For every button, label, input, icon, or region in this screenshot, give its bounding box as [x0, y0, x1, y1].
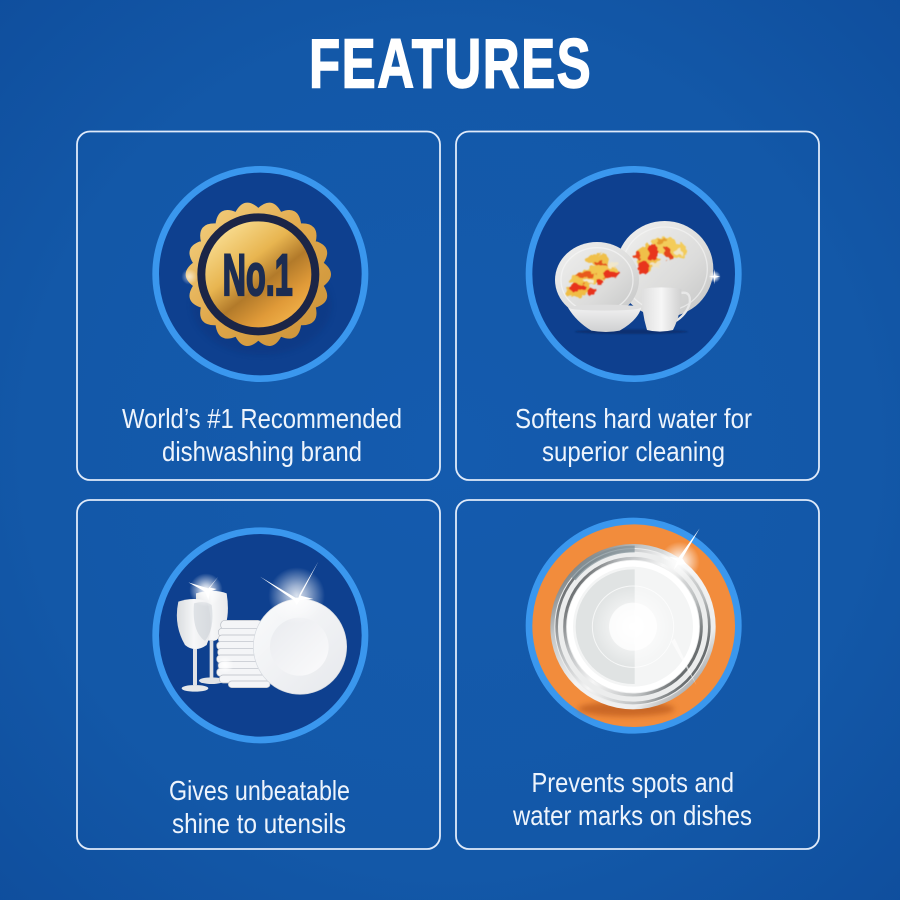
sparkles: [188, 562, 325, 674]
sparkle: [660, 528, 700, 685]
icon: plates, bowl and cup: [529, 169, 738, 379]
caption: superior cleaning: [542, 436, 725, 467]
icon: steel plate on orange: [529, 521, 738, 730]
panel: softens hard water: [456, 132, 819, 480]
panel: no.1 brand: [77, 132, 440, 480]
plate stack: [217, 620, 270, 688]
caption: Gives unbeatable: [169, 775, 350, 806]
caption: [515, 403, 752, 467]
front plate: [253, 599, 347, 694]
caption: Prevents spots and: [532, 767, 734, 798]
caption: [512, 767, 752, 831]
panel: prevents spots: [456, 500, 819, 849]
caption: World’s #1 Recommended: [122, 403, 402, 434]
caption: [169, 775, 350, 839]
icon: no.1 gold badge: [156, 169, 365, 379]
stains: small plate: [565, 254, 620, 300]
caption: [122, 403, 402, 467]
panel: unbeatable shine: [77, 500, 440, 849]
stains: big plate: [633, 233, 690, 273]
back glass: [196, 591, 228, 684]
icon: glasses and plates: [156, 531, 365, 740]
icon: no.1 gold badge: No.1: [223, 243, 293, 308]
caption: water marks on dishes: [512, 800, 752, 831]
title: FEATURES: [309, 25, 592, 102]
caption: shine to utensils: [172, 808, 346, 839]
caption: dishwashing brand: [162, 436, 362, 467]
front glass: [177, 599, 212, 692]
caption: Softens hard water for: [515, 403, 752, 434]
